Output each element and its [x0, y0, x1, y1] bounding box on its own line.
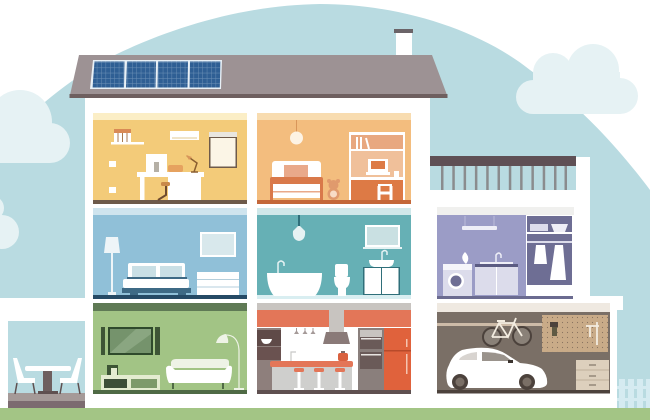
dresser	[197, 272, 239, 295]
mirror	[200, 232, 236, 257]
pot	[338, 351, 348, 361]
room: patio	[8, 321, 85, 408]
desk	[137, 154, 204, 200]
bookcase	[349, 132, 405, 200]
air conditioner	[170, 131, 199, 140]
car	[446, 348, 547, 390]
ovens	[358, 328, 384, 390]
teddy bear	[327, 179, 340, 200]
ceiling light	[462, 216, 497, 230]
fence	[617, 379, 650, 408]
sink cabinet	[475, 253, 518, 295]
house body	[85, 98, 623, 408]
drawers	[576, 360, 609, 390]
bed	[270, 161, 323, 200]
kitchen island	[270, 352, 353, 390]
washing machine	[443, 252, 472, 296]
room: kids bedroom	[257, 113, 411, 204]
speakers	[101, 327, 160, 355]
room: bathroom	[257, 208, 411, 299]
floor lamp	[104, 237, 120, 295]
sink cabinet	[363, 250, 400, 295]
fridge	[384, 328, 411, 390]
chimney	[394, 29, 413, 56]
mirror	[363, 225, 402, 249]
arc lamp	[216, 334, 244, 390]
closet	[527, 216, 572, 285]
room: living room	[93, 303, 247, 394]
wall board	[209, 132, 237, 168]
television	[108, 327, 153, 355]
bicycle	[483, 318, 531, 346]
room: laundry	[437, 207, 574, 299]
pendant lights	[294, 328, 316, 334]
chair right	[60, 358, 82, 394]
pendant	[293, 215, 305, 241]
bed	[122, 263, 191, 295]
chair left	[13, 358, 35, 394]
solar panels	[90, 60, 222, 89]
sofa	[166, 359, 232, 389]
room: bedroom	[93, 208, 247, 299]
toilet	[334, 264, 350, 296]
left shelf unit	[257, 328, 281, 390]
table	[25, 366, 71, 394]
pegboard with tools	[542, 315, 608, 352]
room: study	[93, 113, 247, 204]
cloud: right	[516, 44, 638, 114]
cloud: left	[0, 90, 70, 163]
balcony	[430, 156, 576, 190]
tv console	[101, 365, 160, 390]
stools	[294, 368, 345, 390]
shelf with books	[111, 129, 144, 144]
room: garage	[437, 303, 610, 394]
cloud: small left	[0, 196, 19, 249]
desk items	[154, 155, 198, 172]
pendant lamp	[290, 120, 303, 144]
switch and socket	[109, 161, 116, 193]
bathtub	[267, 261, 322, 296]
upper cabinets	[257, 310, 411, 327]
roof	[70, 55, 448, 98]
range hood	[323, 310, 350, 344]
ground	[0, 408, 650, 420]
chair	[158, 182, 170, 200]
room: kitchen	[257, 303, 411, 394]
